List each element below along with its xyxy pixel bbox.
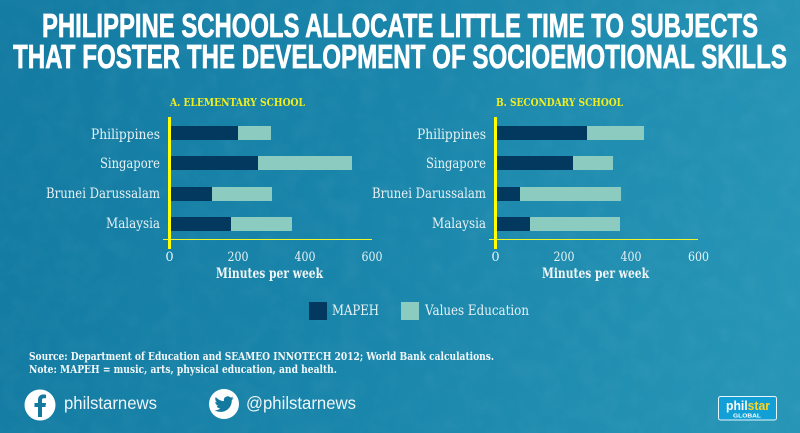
axis ticks: 200 [554, 250, 574, 265]
axis ticks: 0 [491, 250, 500, 265]
icon: twitter [209, 389, 239, 419]
country labels: Malaysia [432, 216, 486, 232]
axis ticks: 400 [294, 250, 316, 265]
country labels [46, 127, 160, 232]
axis ticks: 200 [228, 250, 248, 265]
logo: philstar global: philstar [726, 398, 770, 413]
country labels: Malaysia [106, 216, 160, 232]
axis ticks: 600 [362, 250, 382, 265]
stacked bars [497, 126, 644, 231]
panel: elementary school chart [46, 95, 382, 282]
axis title: Minutes per week [216, 266, 324, 282]
country labels: Philippines [417, 127, 486, 143]
axis ticks: 600 [688, 250, 709, 265]
legend: Values Education [424, 303, 529, 319]
country labels: Singapore [100, 156, 160, 172]
logo: philstar global: GLOBAL [733, 414, 762, 420]
source note [29, 350, 494, 376]
heading: elementary school: A. ELEMENTARY SCHOOL [169, 95, 305, 109]
source note: Source: Department of Education and SEAMEO INNOTECH 2012; World Bank calculations. [29, 350, 494, 363]
country labels: Brunei Darussalam [46, 186, 160, 202]
panel: secondary school chart [372, 95, 709, 282]
axis ticks: 400 [620, 250, 642, 265]
source note: Note: MAPEH = music, arts, physical education, and health. [29, 363, 337, 376]
country labels: Philippines [91, 127, 160, 143]
title [13, 7, 787, 75]
facebook handle: philstarnews [64, 393, 157, 413]
legend: MAPEH [332, 303, 379, 319]
axes [489, 117, 698, 249]
country labels: Singapore [426, 156, 486, 172]
axis ticks [165, 250, 382, 265]
country labels [372, 127, 486, 232]
axes [163, 117, 372, 249]
axis ticks [491, 250, 709, 265]
axis ticks: 0 [165, 250, 174, 265]
twitter handle: @philstarnews [246, 393, 356, 413]
heading: secondary school: B. SECONDARY SCHOOL [496, 95, 623, 109]
legend [309, 302, 529, 320]
icon: facebook [24, 390, 56, 420]
country labels: Brunei Darussalam [372, 186, 486, 202]
stacked bars [171, 126, 352, 231]
axis title: Minutes per week [542, 266, 650, 282]
logo: philstar global [718, 396, 776, 420]
